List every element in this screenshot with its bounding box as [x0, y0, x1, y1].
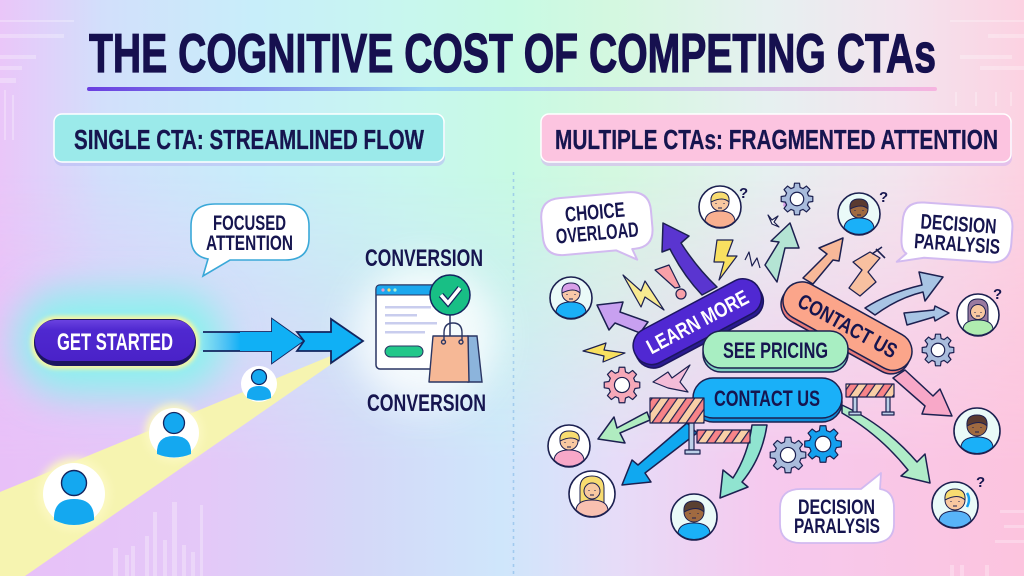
user icon medium [145, 404, 203, 462]
person 9: ? [976, 474, 985, 491]
callout: decision paralysis top [897, 201, 1014, 270]
button: contact us blue [693, 378, 842, 422]
panel: multiple CTAs chaos [540, 183, 1014, 543]
check badge [430, 275, 470, 315]
person 3 [550, 277, 592, 319]
callout: choice overload: CHOICE [564, 199, 626, 227]
attention beam [0, 355, 333, 576]
button: see pricing: SEE PRICING [723, 338, 828, 363]
heading: single CTA [54, 114, 445, 166]
heading: multiple CTAs [541, 114, 1012, 166]
person 4 [957, 286, 1002, 336]
arrow 1 [200, 319, 303, 363]
button: get started [31, 316, 199, 369]
button: contact us orange: CONTACT US [794, 290, 901, 363]
arrow 2 [297, 319, 363, 363]
callout: focused attention: FOCUSED [213, 211, 286, 235]
person 1: ? [739, 185, 748, 202]
shopping bag [429, 323, 482, 382]
person 7 [671, 494, 717, 540]
gears [604, 183, 954, 473]
glow behind button [15, 263, 497, 407]
panel: single CTA flow [0, 204, 497, 576]
conversion icon: page and bag [376, 275, 482, 382]
person 6 [569, 471, 615, 517]
person 2: ? [879, 189, 888, 206]
person 9 [932, 474, 985, 528]
callout: choice overload: OVERLOAD [555, 218, 640, 249]
barrier back [697, 384, 894, 443]
button: contact us orange [774, 275, 919, 381]
arrows scattering [597, 223, 952, 498]
callout: decision paralysis bottom [780, 473, 894, 543]
user icon small [241, 366, 277, 402]
squiggle [849, 247, 885, 296]
person 5 [548, 425, 590, 467]
callout: decision paralysis top: DECISION [920, 210, 997, 239]
label: conversion top: CONVERSION [365, 245, 483, 272]
lightning bolts and alerts [583, 190, 795, 392]
callout: decision paralysis bottom: PARALYSIS [794, 515, 880, 538]
person 4: ? [993, 286, 1002, 303]
callout: focused attention [191, 204, 309, 276]
person 1 [699, 185, 748, 228]
callout: decision paralysis bottom: DECISION [798, 496, 875, 519]
button: contact us blue: CONTACT US [714, 386, 820, 411]
button: get started: GET STARTED [57, 329, 173, 356]
label: conversion bottom: CONVERSION [367, 390, 486, 417]
heading: single CTA: SINGLE CTA: STREAMLINED FLOW [74, 124, 424, 155]
callout: focused attention: ATTENTION [206, 231, 293, 255]
callout: choice overload [540, 190, 655, 268]
person 8 [954, 408, 1000, 454]
user icon large [38, 458, 110, 530]
barrier front [650, 398, 704, 454]
button: see pricing [703, 331, 848, 372]
person 2 [838, 189, 888, 235]
button: learn more: LEARN MORE [643, 286, 753, 359]
